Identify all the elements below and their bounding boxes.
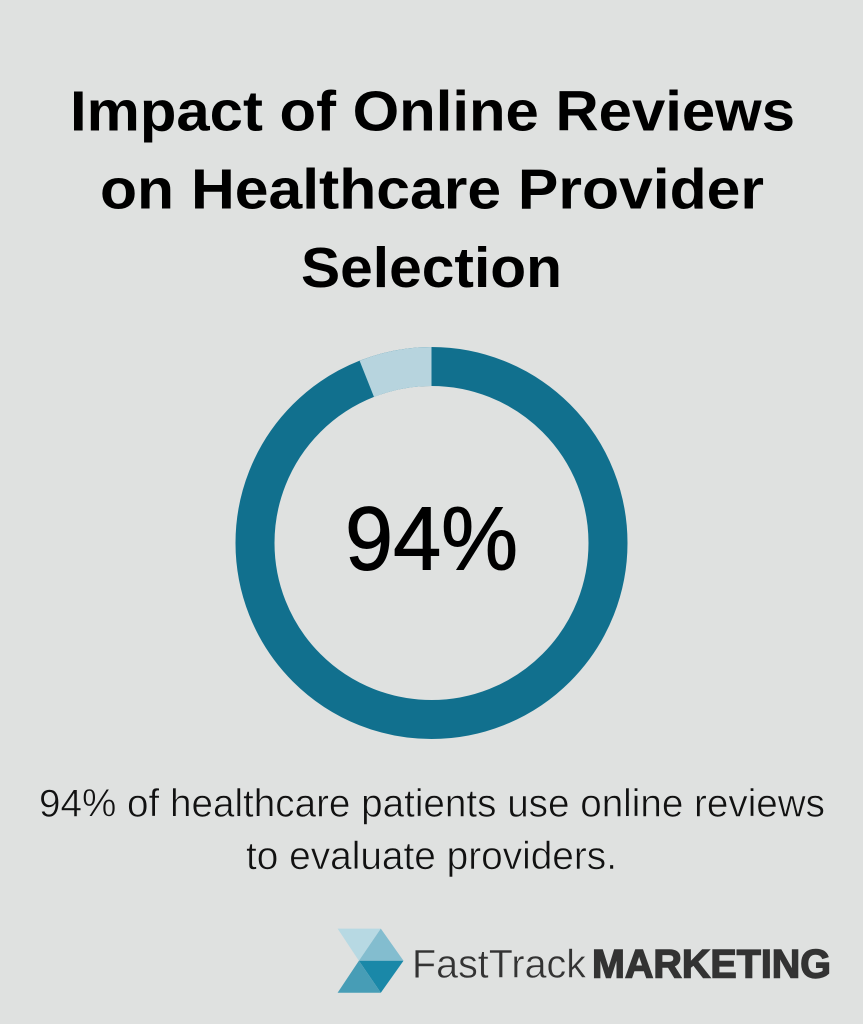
donut chart: 94%	[255, 347, 608, 720]
logo wordmark	[412, 942, 831, 986]
icon: triangles mark	[338, 929, 404, 993]
donut chart: 94%: 94%	[345, 490, 518, 590]
title: Impact of Online Reviews	[70, 80, 795, 144]
title: on Healthcare Provider	[100, 158, 764, 222]
description text: to evaluate providers.	[246, 835, 617, 878]
description text: 94% of healthcare patients use online reviews	[39, 782, 825, 826]
logo wordmark: FastTrack	[412, 942, 587, 986]
description text	[39, 782, 825, 878]
logo wordmark: MARKETING	[592, 942, 831, 986]
logo: FastTrack Marketing	[338, 929, 831, 993]
title	[70, 80, 795, 300]
title: Selection	[301, 236, 562, 300]
